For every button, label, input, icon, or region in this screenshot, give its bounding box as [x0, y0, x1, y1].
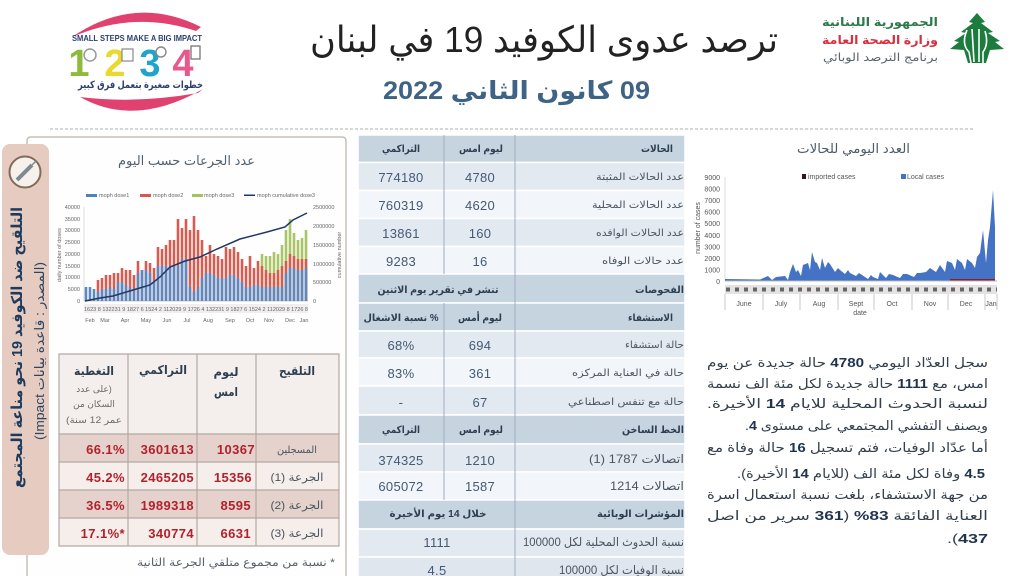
chart: daily cases: 4000	[704, 233, 720, 240]
chart: daily vaccine doses: Jun	[163, 318, 171, 324]
row: dose 2: الجرعة (2)	[270, 500, 324, 512]
chart: daily vaccine doses: 1623 8 132231 9 1827 6 1524 2 112029 9 1726 4 132231 9 1827 6 1524 2 112029 8 1726 8	[84, 307, 308, 313]
chart: daily vaccine doses: 20000	[65, 252, 80, 258]
legend	[802, 174, 944, 181]
chart: daily cases: Aug	[813, 301, 825, 308]
section: hospitalisation: 67	[472, 395, 488, 410]
chart: daily vaccine doses: Feb	[85, 318, 95, 324]
table: vaccination: عمر 12 سنة)	[66, 415, 122, 425]
chart: daily cases: July	[775, 301, 788, 308]
section: epidemiological indicators: خلال 14 يوم الأخيرة	[390, 507, 486, 520]
section: epidemiological indicators: نسبة الحدوث المحلية لكل 100000	[523, 535, 684, 550]
chart: daily cases: Nov	[924, 301, 937, 308]
table: vaccination	[59, 354, 339, 546]
chart: daily vaccine doses: 40000	[65, 205, 80, 211]
section: hotline	[378, 425, 684, 494]
chart: daily cases: June	[736, 301, 752, 308]
panel: vaccination	[2, 137, 346, 576]
section: hospitalisation: -	[399, 395, 403, 410]
ministry name text: الجمهورية اللبنانية	[822, 15, 938, 30]
section: hotline: 1587	[465, 479, 495, 494]
section: cases: 760319	[378, 198, 424, 213]
text block: daily summary: امس، مع 1111 حالة جديدة لكل مئة الف نسمة	[707, 376, 988, 392]
chart: daily vaccine doses: Dec	[285, 318, 295, 324]
section: cases: 13861	[382, 226, 420, 241]
section: cases: عدد حالات الوفاه	[602, 256, 684, 267]
chart: daily vaccine doses: 2000000	[313, 224, 334, 230]
logo: small steps make a big impact: 2	[104, 43, 126, 85]
text block: daily summary: 437).	[947, 531, 988, 546]
section: tests: الفحوصات	[635, 285, 684, 296]
sidebar: vaccination title: التلقيح ضد الكوفيد 19 نحو مناعة المجتمع	[9, 207, 26, 488]
chart: daily vaccine doses: Sep	[225, 318, 235, 324]
legend: moph cumulative dose3	[257, 193, 315, 199]
section: hotline: 605072	[378, 479, 424, 494]
chart: daily vaccine doses: Nov	[264, 318, 274, 324]
logo: small steps make a big impact: خطوات صغيرة بتعمل فرق كبير	[77, 80, 203, 91]
table: vaccination: ليوم	[214, 365, 238, 380]
row: dose 3: 17.1%*	[81, 526, 126, 541]
legend: imported cases	[808, 174, 856, 181]
section: cases: الحالات	[641, 144, 673, 155]
section: cases: 4780	[465, 170, 495, 185]
legend: moph dose2	[153, 193, 183, 199]
section: epidemiological indicators: 1111	[423, 535, 451, 550]
section: cases: عدد الحالات المثبتة	[596, 172, 684, 183]
area: local cases	[725, 190, 995, 281]
chart: daily vaccine doses: Oct	[246, 318, 255, 324]
row: dose 2: 1989318	[141, 498, 194, 513]
row: dose 3: 6631	[220, 526, 251, 541]
row: dose 2	[86, 498, 324, 513]
ministry name text: برنامج الترصد الوبائي	[823, 52, 938, 64]
chart: daily cases: date	[853, 310, 867, 317]
section: hospitalisation: 83%	[388, 366, 415, 381]
chart: daily cases: 0	[716, 279, 720, 286]
row: registered: 66.1%	[86, 442, 125, 457]
row: dose 2: 36.5%	[86, 498, 125, 513]
section: epidemiological indicators	[390, 507, 684, 576]
icon: cedar logo	[950, 13, 1004, 63]
table: vaccination: (على عدد	[76, 384, 112, 394]
row: dose 3: 340774	[148, 526, 194, 541]
section: hospitalisation: 694	[469, 338, 491, 353]
section: hotline: التراكمي	[382, 425, 420, 436]
row: registered: 10367	[217, 442, 255, 457]
section: hotline: اتصالات 1787 (1)	[589, 452, 684, 466]
table: vaccination: التراكمي	[139, 363, 187, 377]
chart: daily vaccine doses: 35000	[65, 217, 80, 223]
section: cases: 4620	[465, 198, 495, 213]
title: ترصد عدوى الكوفيد 19 في لبنان	[310, 19, 778, 61]
section: hotline: 1210	[465, 453, 495, 468]
chart: daily cases: Oct	[887, 301, 897, 308]
text block: daily summary: ويصنف التفشي المجتمعي على مستوى 4.	[745, 418, 988, 434]
footnote: * نسبة من مجموع متلقي الجرعة الثانية	[137, 557, 336, 569]
section: cases: عدد الحالات الوافده	[596, 228, 684, 239]
chart: daily cases: 3000	[704, 244, 720, 252]
ministry name text	[822, 15, 938, 64]
row: dose 3: الجرعة (3)	[270, 528, 324, 540]
panel: indicators table	[358, 135, 685, 576]
section: hospitalisation: حالة استشفاء	[625, 340, 684, 351]
chart: daily cases: number of cases	[695, 202, 702, 254]
chart: daily cases: 7000	[704, 198, 720, 205]
row: dose 2: 8595	[220, 498, 251, 513]
row: dose 3	[81, 526, 324, 541]
section: hospitalisation: 361	[469, 366, 491, 381]
chart: daily vaccine doses: 0	[313, 299, 316, 305]
text block: daily summary: أما عدّاد الوفيات، فتم تسجيل 16 حالة وفاة مع	[707, 439, 988, 456]
area: imported cases	[950, 279, 995, 282]
chart: daily cases: 6000	[704, 210, 720, 216]
chart: daily vaccine doses: Jan	[300, 318, 308, 324]
chart: daily cases	[695, 174, 997, 317]
table: vaccination: التغطية	[74, 364, 114, 378]
legend: moph dose1	[99, 193, 129, 199]
row: registered	[86, 442, 317, 457]
chart: daily vaccine doses: 1500000	[313, 243, 334, 249]
chart: daily cases: Jan	[985, 301, 997, 308]
section: hotline: اتصالات 1214	[610, 479, 684, 493]
section: hospitalisation	[364, 311, 684, 410]
logo: small steps make a big impact: 3	[139, 43, 161, 85]
section: hotline: الخط الساخن	[622, 425, 684, 436]
bars: dose 1	[86, 259, 306, 301]
text block: daily summary: 4.5 وفاة لكل مئة الف (للايام 14 الأخيرة).	[737, 465, 985, 482]
section: tests	[378, 285, 684, 296]
section: hospitalisation: الاستشفاء	[628, 313, 673, 324]
chart: daily vaccine doses: 2500000	[313, 205, 334, 211]
text block: daily summary: لنسبة الحدوث المحلية للايام 14 الأخيرة.	[707, 395, 988, 412]
legend	[86, 193, 315, 199]
row: dose 1: 45.2%	[86, 470, 125, 485]
section: cases: ليوم امس	[459, 144, 503, 155]
chart: daily cases: Dec	[960, 301, 973, 308]
chart: daily vaccine doses: 5000	[68, 287, 80, 293]
legend: Local cases	[907, 174, 944, 181]
chart: daily cases: 5000	[704, 221, 720, 228]
text block: daily summary: سجل العدّاد اليومي 4780 حالة جديدة عن يوم	[707, 355, 988, 371]
section: hospitalisation: ليوم أمس	[458, 311, 502, 324]
section: hospitalisation: حالة مع تنفس اصطناعي	[568, 397, 684, 408]
section: cases: 160	[469, 226, 491, 241]
section: cases: التراكمي	[382, 144, 420, 155]
table: vaccination: السكان من	[73, 399, 115, 409]
chart: daily vaccine doses	[57, 193, 343, 324]
logo: small steps make a big impact: 1	[68, 43, 90, 85]
section: cases: 774180	[378, 170, 424, 185]
chart: daily vaccine doses: May	[141, 318, 151, 324]
date heading: 09 كانون الثاني 2022	[383, 77, 650, 106]
ministry name text: وزارة الصحة العامة	[822, 33, 938, 48]
chart: daily cases: 2000	[704, 256, 720, 263]
chart: daily vaccine doses: 10000	[65, 275, 80, 281]
chart: daily cases: Sept	[849, 301, 863, 308]
bars: dose 3	[262, 219, 306, 301]
section: cases	[378, 144, 684, 269]
chart: daily vaccine doses: 1000000	[313, 262, 334, 268]
section: cases: 9283	[386, 254, 416, 269]
dashed header divider	[50, 128, 975, 130]
row: dose 1: 2465205	[141, 470, 194, 485]
section: hospitalisation: 68%	[388, 338, 415, 353]
text block: daily summary: من جهة الاستشفاء، بلغت نسبة استعمال اسرة	[707, 487, 988, 503]
row: dose 1: الجرعة (1)	[270, 472, 324, 484]
heading: daily doses: عدد الجرعات حسب اليوم	[118, 153, 255, 169]
chart: daily vaccine doses: cumulative number	[337, 232, 343, 278]
logo: small steps make a big impact: 4	[172, 43, 194, 85]
table: vaccination: امس	[214, 385, 238, 399]
chart: daily vaccine doses: Jul	[183, 318, 191, 324]
section: hospitalisation: حالة في العناية المركزه	[572, 368, 684, 379]
table: vaccination: التلقيح	[279, 364, 315, 378]
chart: daily vaccine doses: 500000	[313, 280, 331, 286]
chart: daily vaccine doses: Mar	[100, 318, 110, 324]
row: registered: 3601613	[141, 442, 194, 457]
heading: daily cases: العدد اليومي للحالات	[797, 141, 910, 157]
section: tests: تنشر في تقرير يوم الاثنين	[378, 285, 499, 296]
chart: daily vaccine doses: 30000	[65, 228, 80, 234]
sidebar: vaccination title: (المصدر : قاعدة بيانات Impact)	[32, 262, 48, 440]
icon: syringe in circle	[10, 156, 40, 188]
chart: daily cases: 8000	[704, 186, 720, 194]
bars: dose 2	[98, 216, 306, 301]
chart: daily vaccine doses: Aug	[203, 318, 213, 324]
chart: daily cases: 1000	[704, 268, 720, 274]
chart: daily vaccine doses: 0	[77, 299, 80, 305]
section: hospitalisation: % نسبة الاشغال	[364, 313, 439, 324]
logo: small steps make a big impact: SMALL STEPS MAKE A BIG IMPACT	[72, 34, 202, 43]
text block: daily summary: العناية الفائقة 83% (361 سرير من اصل	[707, 508, 988, 524]
sidebar: vaccination title	[2, 144, 49, 555]
logo: small steps make a big impact	[68, 13, 203, 111]
chart: daily vaccine doses: Apr	[121, 318, 129, 324]
section: cases: 16	[472, 254, 488, 269]
row: dose 1	[86, 470, 324, 485]
section: epidemiological indicators: المؤشرات الوبائية	[597, 509, 684, 520]
chart: daily cases: 9000	[704, 175, 720, 182]
section: cases: عدد الحالات المحلية	[592, 200, 684, 211]
row: registered: المسجلين	[277, 445, 317, 456]
chart: daily vaccine doses: 15000	[65, 264, 80, 270]
legend: moph dose3	[204, 193, 234, 199]
text block: daily summary	[707, 355, 988, 546]
row: dose 1: 15356	[214, 470, 252, 485]
chart: daily vaccine doses: daily number of doses	[57, 228, 63, 282]
section: hotline: ليوم امس	[459, 425, 503, 436]
line: cumulative dose	[85, 213, 307, 301]
chart: daily vaccine doses: 25000	[65, 240, 80, 246]
section: hotline: 374325	[378, 453, 424, 468]
